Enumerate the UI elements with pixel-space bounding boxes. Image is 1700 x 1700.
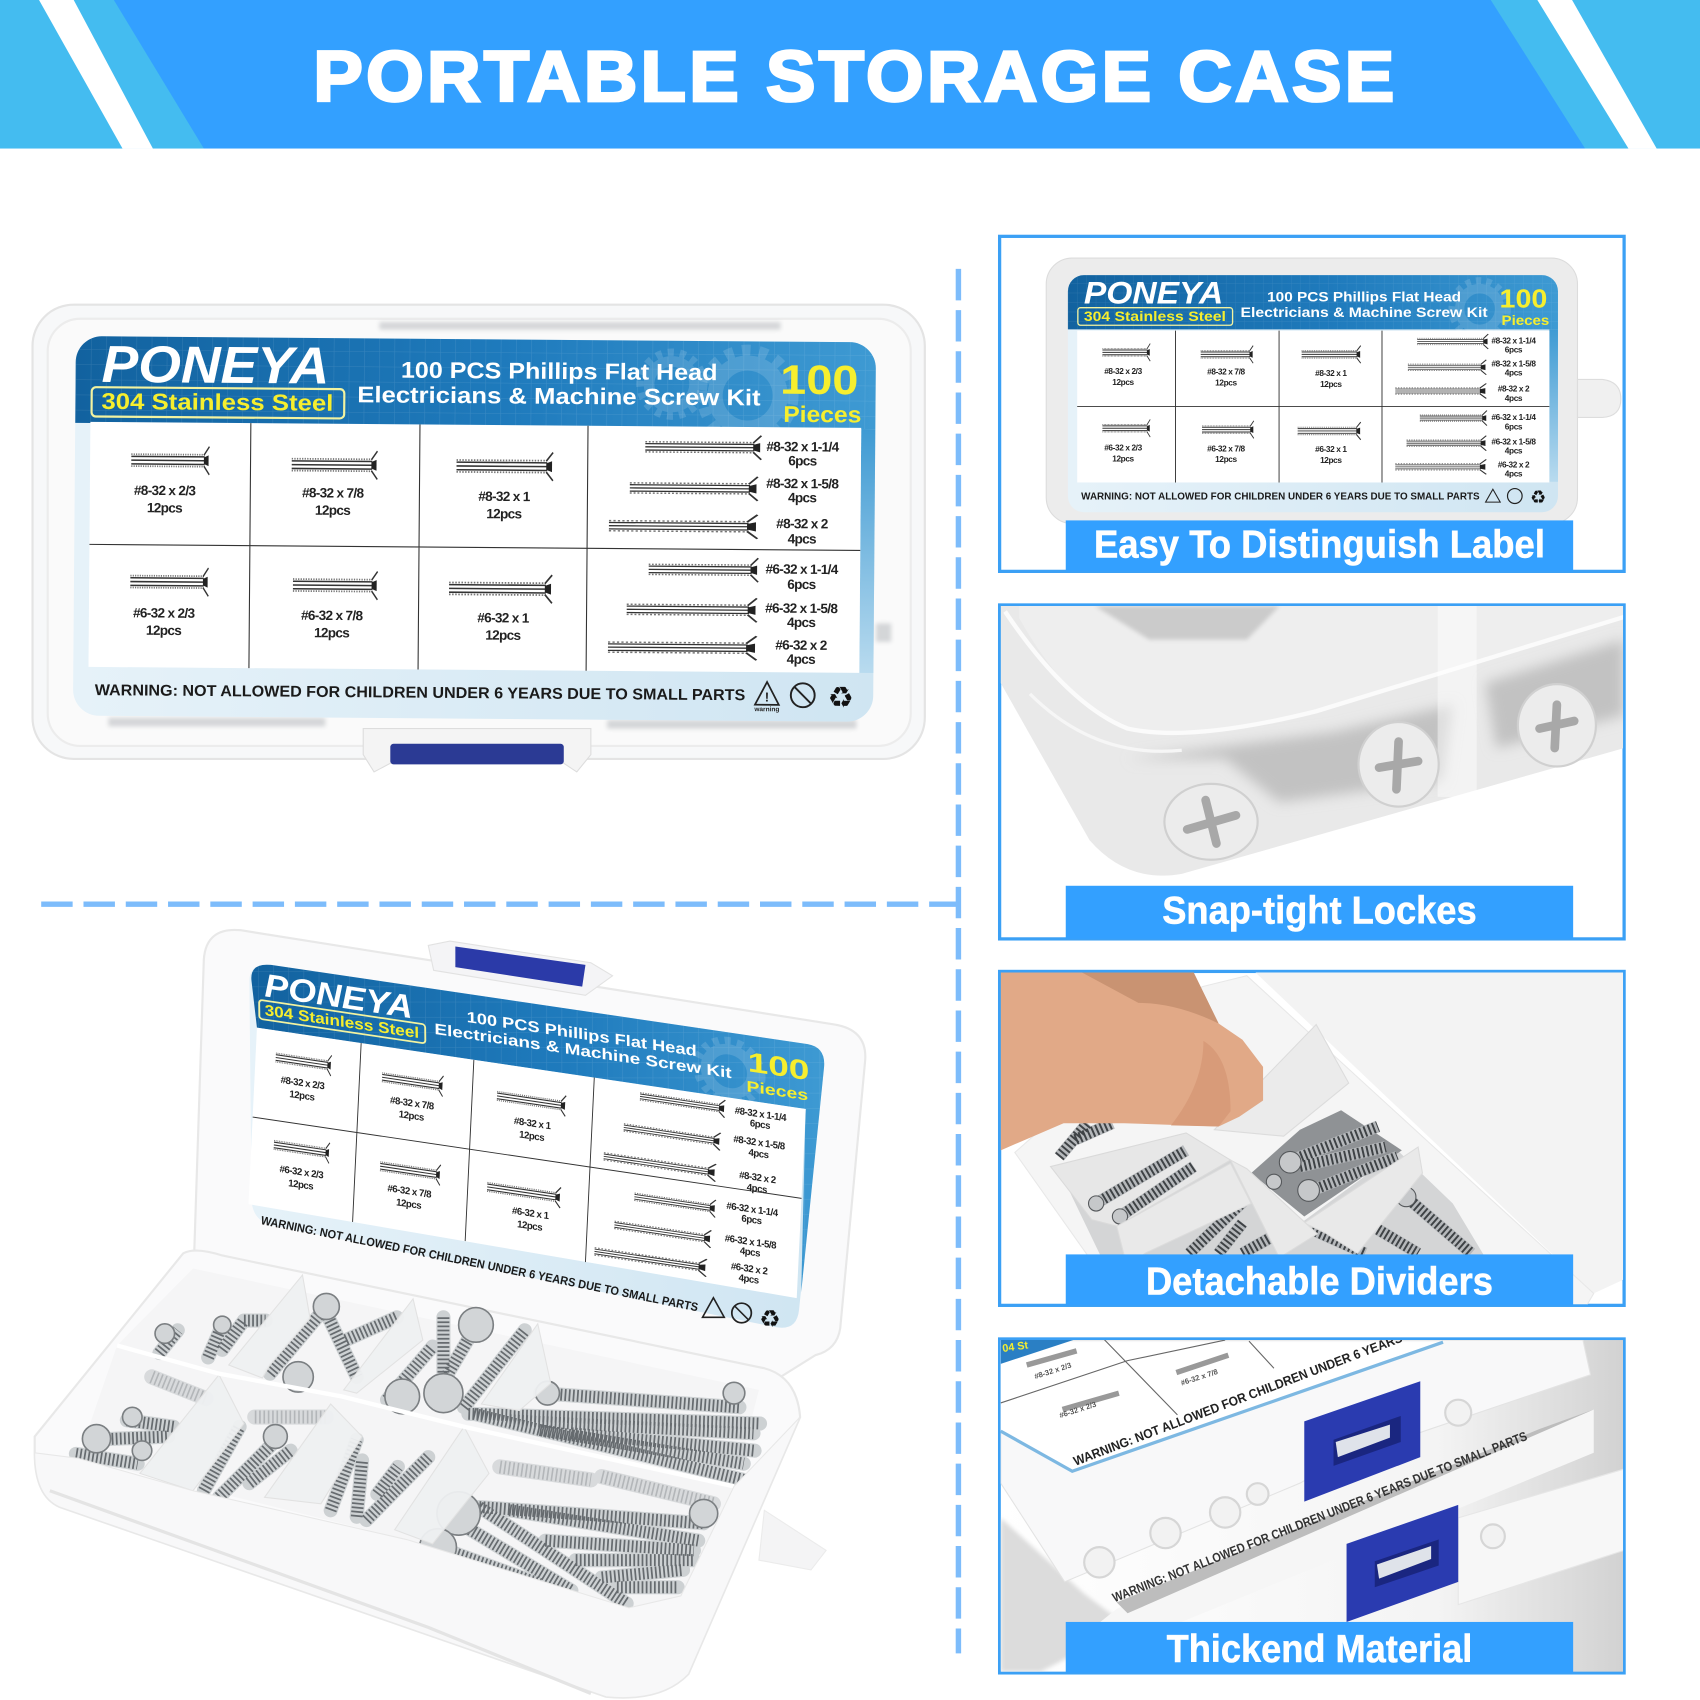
- photo of stacked cases: WARNING: NOT ALLOWED FOR CHILDREN UNDER 6 YEARS DUE: [1071, 1320, 1432, 1469]
- screw heads: [82, 1293, 745, 1566]
- product label: #6-32 x 1: [477, 610, 530, 626]
- lid label: 4pcs: [738, 1273, 760, 1287]
- product label: #6-32 x 2/3: [133, 605, 196, 621]
- photo of stacked cases: 04 St: [1002, 1339, 1029, 1355]
- caption bar: Detachable Dividers: [1146, 1261, 1493, 1304]
- panel: easy to distinguish label: [1000, 236, 1624, 571]
- product label: #6-32 x 7/8: [301, 608, 364, 623]
- small case photo: 100: [1500, 285, 1547, 314]
- small case photo: #6-32 x 2/3: [1104, 443, 1143, 453]
- lid label: #6-32 x 7/8: [387, 1183, 432, 1201]
- small case photo: 12pcs: [1215, 377, 1237, 388]
- lid label strip: [1000, 1342, 1002, 1431]
- lid label: WARNING: NOT ALLOWED FOR CHILDREN UNDER 6 YEARS DUE TO SMALL PARTS: [260, 1213, 699, 1314]
- product label: 304 Stainless Steel: [101, 388, 334, 416]
- small case photo: WARNING: NOT ALLOWED FOR CHILDREN UNDER 6 YEARS DUE TO SMALL PARTS: [1081, 491, 1480, 502]
- small case photo: #8-32 x 7/8: [1207, 367, 1245, 377]
- small case photo: 4pcs: [1505, 393, 1523, 403]
- product label: #6-32 x 1-1/4: [765, 562, 839, 577]
- product label: Electricians & Machine Screw Kit: [357, 381, 761, 410]
- lid label: 12pcs: [288, 1178, 314, 1193]
- product label: 4pcs: [787, 615, 815, 630]
- product label: #8-32 x 1-5/8: [766, 476, 839, 491]
- small case photo: #6-32 x 7/8: [1207, 443, 1245, 453]
- product label: #8-32 x 1-1/4: [766, 439, 840, 455]
- lid label: 100: [747, 1047, 810, 1087]
- caption bar: Thickend Material: [1167, 1628, 1472, 1671]
- hand: [1001, 973, 1263, 1150]
- lid latch: [428, 941, 613, 995]
- screws in dividers: [1059, 1123, 1471, 1253]
- product label: 100: [780, 357, 859, 403]
- small case photo: #8-32 x 2/3: [1104, 366, 1143, 376]
- small case photo: PONEYA: [1084, 275, 1223, 311]
- closeup of case corner: [1001, 606, 1624, 876]
- small case photo: ♻: [1530, 487, 1546, 509]
- small case photo: 4pcs: [1505, 445, 1523, 455]
- small case photo: 12pcs: [1215, 454, 1237, 464]
- small case photo: #6-32 x 2: [1498, 459, 1530, 470]
- photo of stacked cases: #6-32 x 7/8: [1180, 1367, 1219, 1387]
- product label: Pieces: [783, 401, 861, 427]
- small case photo: 304 Stainless Steel: [1084, 308, 1226, 324]
- product photo: open case with screws: [35, 930, 865, 1698]
- product label: WARNING: NOT ALLOWED FOR CHILDREN UNDER 6 YEARS DUE TO SMALL PARTS: [95, 682, 745, 704]
- small case photo: 12pcs: [1112, 377, 1135, 387]
- lid label: #6-32 x 1: [512, 1206, 550, 1222]
- divider ridge: [117, 1345, 734, 1486]
- faded screws behind dividers: [152, 1377, 713, 1504]
- product label: #8-32 x 1: [478, 489, 531, 504]
- divider: dashed lines: [41, 269, 958, 1653]
- case lid: [194, 930, 865, 1377]
- lid label: 12pcs: [396, 1197, 422, 1212]
- small case photo: 100 PCS Phillips Flat Head: [1267, 288, 1461, 305]
- panel: snap-tight locks: [1000, 605, 1624, 939]
- lid label: 6pcs: [750, 1118, 771, 1132]
- lid label: #6-32 x 1-1/4: [726, 1201, 779, 1220]
- product label: 100 PCS Phillips Flat Head: [401, 357, 718, 385]
- product label: 12pcs: [146, 623, 181, 638]
- small case photo: 12pcs: [1320, 379, 1342, 389]
- small case photo: 12pcs: [1112, 453, 1135, 463]
- lid label: 4pcs: [747, 1182, 768, 1196]
- product label: warning: [753, 706, 779, 713]
- case tray: [35, 1251, 800, 1698]
- lid label: ♻: [759, 1305, 780, 1333]
- photo of stacked cases: #8-32 x 2/3: [1033, 1361, 1072, 1381]
- caption bar: Snap-tight Lockes: [1162, 890, 1477, 933]
- title: PORTABLE STORAGE CASE: [313, 37, 1398, 117]
- lid label: 304 Stainless Steel: [265, 1003, 419, 1042]
- product label: PONEYA: [101, 336, 330, 396]
- tray front wall: [35, 1417, 800, 1698]
- product label: 12pcs: [315, 503, 350, 518]
- lid label: 4pcs: [740, 1246, 761, 1260]
- product label: ♻: [827, 680, 854, 715]
- lid label: 12pcs: [399, 1109, 425, 1124]
- product photo: closed case top view: [33, 305, 925, 772]
- lid label: #6-32 x 2/3: [279, 1164, 324, 1182]
- lid label: #8-32 x 7/8: [390, 1095, 435, 1113]
- panel: thickened material: [1000, 1320, 1624, 1673]
- product label: 4pcs: [788, 531, 816, 547]
- photo of stacked cases: #6-32 x 2/3: [1058, 1400, 1097, 1420]
- small case photo: #6-32 x 1-1/4: [1491, 412, 1536, 422]
- lid label: Pieces: [746, 1079, 809, 1104]
- divider pieces: [1117, 1025, 1422, 1268]
- tray dividers: [140, 1275, 551, 1544]
- product label: !: [765, 689, 769, 705]
- lid label: 12pcs: [289, 1089, 316, 1104]
- product label: #8-32 x 2: [776, 516, 828, 531]
- lid label: Electricians & Machine Screw Kit: [434, 1021, 733, 1082]
- lid label: 12pcs: [517, 1219, 543, 1234]
- blue latch: [390, 744, 564, 764]
- small case photo: #8-32 x 1-5/8: [1491, 359, 1536, 369]
- caption bar: [1066, 1254, 1573, 1305]
- lid label: #8-32 x 1-1/4: [735, 1106, 787, 1124]
- small case photo: Electricians & Machine Screw Kit: [1241, 304, 1488, 320]
- lid label: 4pcs: [748, 1147, 770, 1162]
- panel: detachable dividers: [1000, 971, 1624, 1312]
- caption bar: [1066, 1622, 1573, 1673]
- tray side tab: [759, 1510, 826, 1570]
- screws: [76, 1306, 760, 1604]
- product label: 6pcs: [787, 577, 816, 592]
- blue latch upper: [1304, 1381, 1420, 1502]
- small case photo: 6pcs: [1505, 422, 1523, 432]
- product label: 4pcs: [787, 652, 815, 667]
- small case photo: 12pcs: [1320, 455, 1342, 465]
- product label: 4pcs: [788, 490, 816, 505]
- product label: #8-32 x 2/3: [134, 483, 197, 498]
- lid label: PONEYA: [264, 967, 413, 1026]
- small case photo: Pieces: [1502, 312, 1550, 328]
- lid label: #8-32 x 2: [739, 1170, 777, 1187]
- small case photo: #8-32 x 1: [1315, 368, 1347, 378]
- photo of stacked cases: WARNING: NOT ALLOWED FOR CHILDREN UNDER 6 YEARS DUE TO SMALL PARTS: [1110, 1428, 1529, 1605]
- header banner: [0, 0, 1700, 149]
- caption bar: Easy To Distinguish Label: [1094, 523, 1545, 566]
- lid label: #6-32 x 1-5/8: [725, 1233, 777, 1252]
- small case photo: [1046, 258, 1621, 524]
- photo of stacked cases: [1001, 1320, 1624, 1672]
- screw heads through case: [1084, 1400, 1505, 1577]
- lid label: #8-32 x 1-5/8: [733, 1134, 786, 1153]
- product label: #6-32 x 2: [775, 638, 827, 653]
- caption bar: [1066, 886, 1573, 939]
- lid label: #8-32 x 2/3: [280, 1075, 326, 1093]
- small case photo: #6-32 x 1-5/8: [1491, 436, 1536, 447]
- product label: 12pcs: [314, 625, 349, 640]
- lid label: [248, 965, 824, 1333]
- product label: 12pcs: [486, 506, 522, 521]
- lid label: 6pcs: [741, 1213, 763, 1227]
- small case photo: #6-32 x 1: [1315, 444, 1347, 454]
- product label: 6pcs: [788, 453, 817, 469]
- small case photo: #8-32 x 1-1/4: [1491, 335, 1536, 346]
- lid label: #8-32 x 1: [514, 1116, 552, 1132]
- lid label: 100 PCS Phillips Flat Head: [467, 1009, 697, 1060]
- product label: 12pcs: [485, 628, 521, 643]
- small case photo: #8-32 x 2: [1498, 384, 1530, 394]
- photo of hand lifting divider: [1001, 973, 1624, 1312]
- small case photo: 4pcs: [1505, 468, 1523, 478]
- product label: [73, 336, 876, 722]
- product label: #6-32 x 1-5/8: [765, 601, 838, 616]
- product label: #8-32 x 7/8: [302, 485, 365, 501]
- small case photo: 4pcs: [1505, 367, 1523, 377]
- small case photo: 6pcs: [1505, 344, 1523, 354]
- product label: 12pcs: [147, 500, 182, 516]
- lower case body: [1458, 1469, 1624, 1605]
- lid label: 12pcs: [519, 1129, 545, 1144]
- divider walls behind screws: [1051, 1133, 1231, 1226]
- lid label: #6-32 x 2: [731, 1261, 769, 1278]
- blue latch lower: [1347, 1505, 1458, 1622]
